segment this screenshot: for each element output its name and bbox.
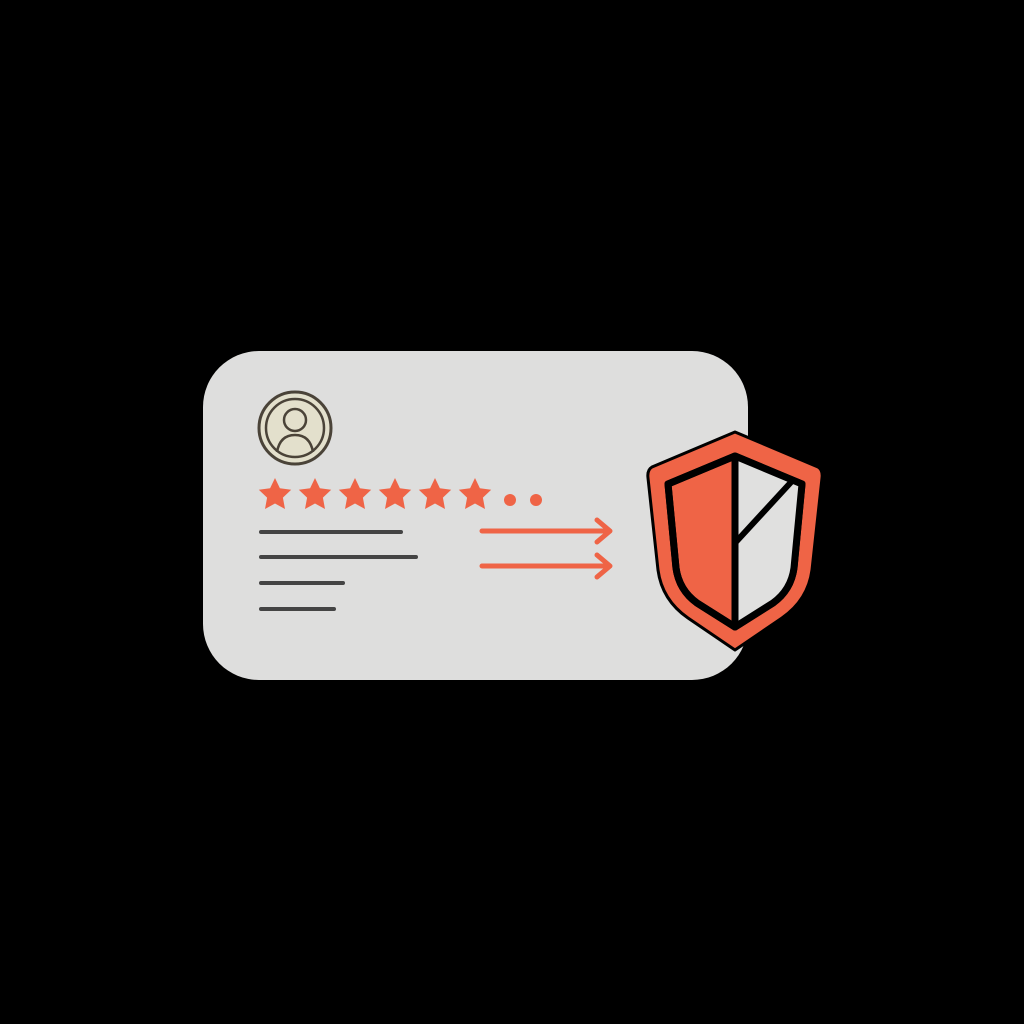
arrows xyxy=(482,520,610,577)
text lines xyxy=(261,532,416,609)
rating stars xyxy=(259,478,542,509)
icon: user avatar xyxy=(259,392,331,464)
panel: review card xyxy=(203,351,748,680)
icon: shield xyxy=(648,432,822,650)
